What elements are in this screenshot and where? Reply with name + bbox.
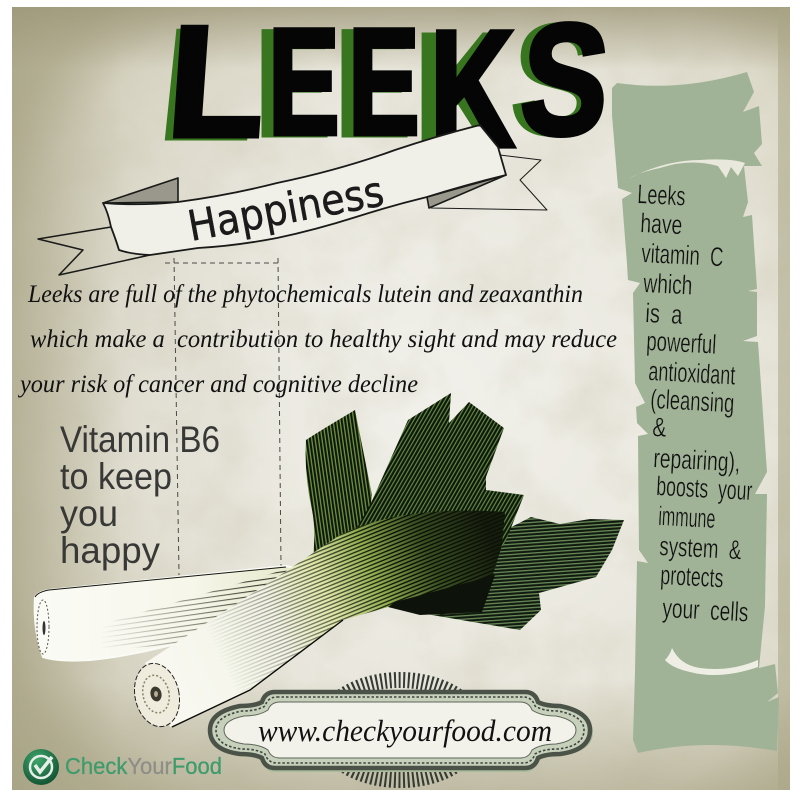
scroll text: (cleansing (650, 384, 735, 418)
back leek stalk (35, 566, 330, 661)
vitamin B6 callout: to keep (60, 456, 172, 497)
scroll text: immune (658, 501, 716, 534)
body paragraph: Leeks are full of the phytochemicals lutein and zeaxanthin (27, 281, 583, 308)
scroll text: repairing), (653, 443, 741, 478)
vitamin B6 callout: you (60, 493, 118, 534)
banner left tail (38, 227, 150, 275)
far right leaf (420, 517, 624, 630)
scroll text: which (642, 268, 693, 301)
body paragraph: your risk of cancer and cognitive decline (17, 371, 418, 398)
body paragraph (17, 281, 617, 398)
scroll text: protects (660, 560, 724, 593)
scroll text: is a (645, 298, 684, 330)
title black letters: E (268, 0, 340, 166)
body paragraph: which make a contribution to healthy sight and may reduce (30, 326, 617, 353)
banner right tail (427, 155, 547, 210)
title green shadow: L (152, 0, 266, 173)
central torn leaf (350, 393, 524, 570)
scroll top fold (628, 159, 745, 179)
scroll text: system & (659, 531, 742, 565)
scroll text: your cells (662, 593, 749, 627)
title black letters: K (430, 0, 514, 182)
banner ribbon (38, 125, 547, 275)
banner text: Happiness: Happiness (184, 167, 388, 251)
badge starburst (322, 680, 478, 780)
badge text: website: www.checkyourfood.com (258, 713, 552, 748)
title green shadow: K (414, 0, 510, 181)
side scroll panel (612, 72, 779, 753)
vitamin B6 callout: happy (60, 530, 160, 571)
scroll text (637, 179, 753, 627)
title black letters (163, 0, 614, 182)
vitamin B6 callout (60, 419, 220, 571)
illustration: leeks (35, 393, 624, 731)
upright leaf (306, 410, 372, 590)
vitamin B6 callout: Vitamin B6 (60, 419, 220, 460)
scroll text: Leeks (637, 179, 686, 212)
website badge (210, 680, 593, 780)
title: LEEKS (152, 0, 614, 182)
logo: Check Your Food (23, 749, 222, 785)
scroll text: & (652, 412, 667, 443)
banner right fold (427, 175, 506, 208)
banner main strip (103, 125, 506, 255)
title green shadow: E (255, 0, 331, 169)
logo wordmark: CheckYourFood (65, 753, 222, 779)
front leek cut end (129, 659, 185, 731)
scroll text: have (640, 208, 683, 240)
scroll text: antioxidant (648, 356, 736, 391)
scroll bottom fold (665, 648, 758, 675)
logo icon (23, 749, 59, 785)
title green shadow: E (335, 0, 411, 169)
title black letters: E (348, 0, 420, 166)
dashed guide box (165, 258, 281, 575)
front leek stalk and wrapped leaf (145, 511, 505, 727)
scroll text: powerful (646, 326, 717, 360)
title green shadow (152, 0, 611, 181)
banner left fold (103, 178, 178, 203)
scroll shape (612, 72, 779, 753)
scroll text: boosts your (656, 471, 753, 506)
scroll text: vitamin C (641, 238, 724, 272)
badge frame (210, 692, 593, 772)
